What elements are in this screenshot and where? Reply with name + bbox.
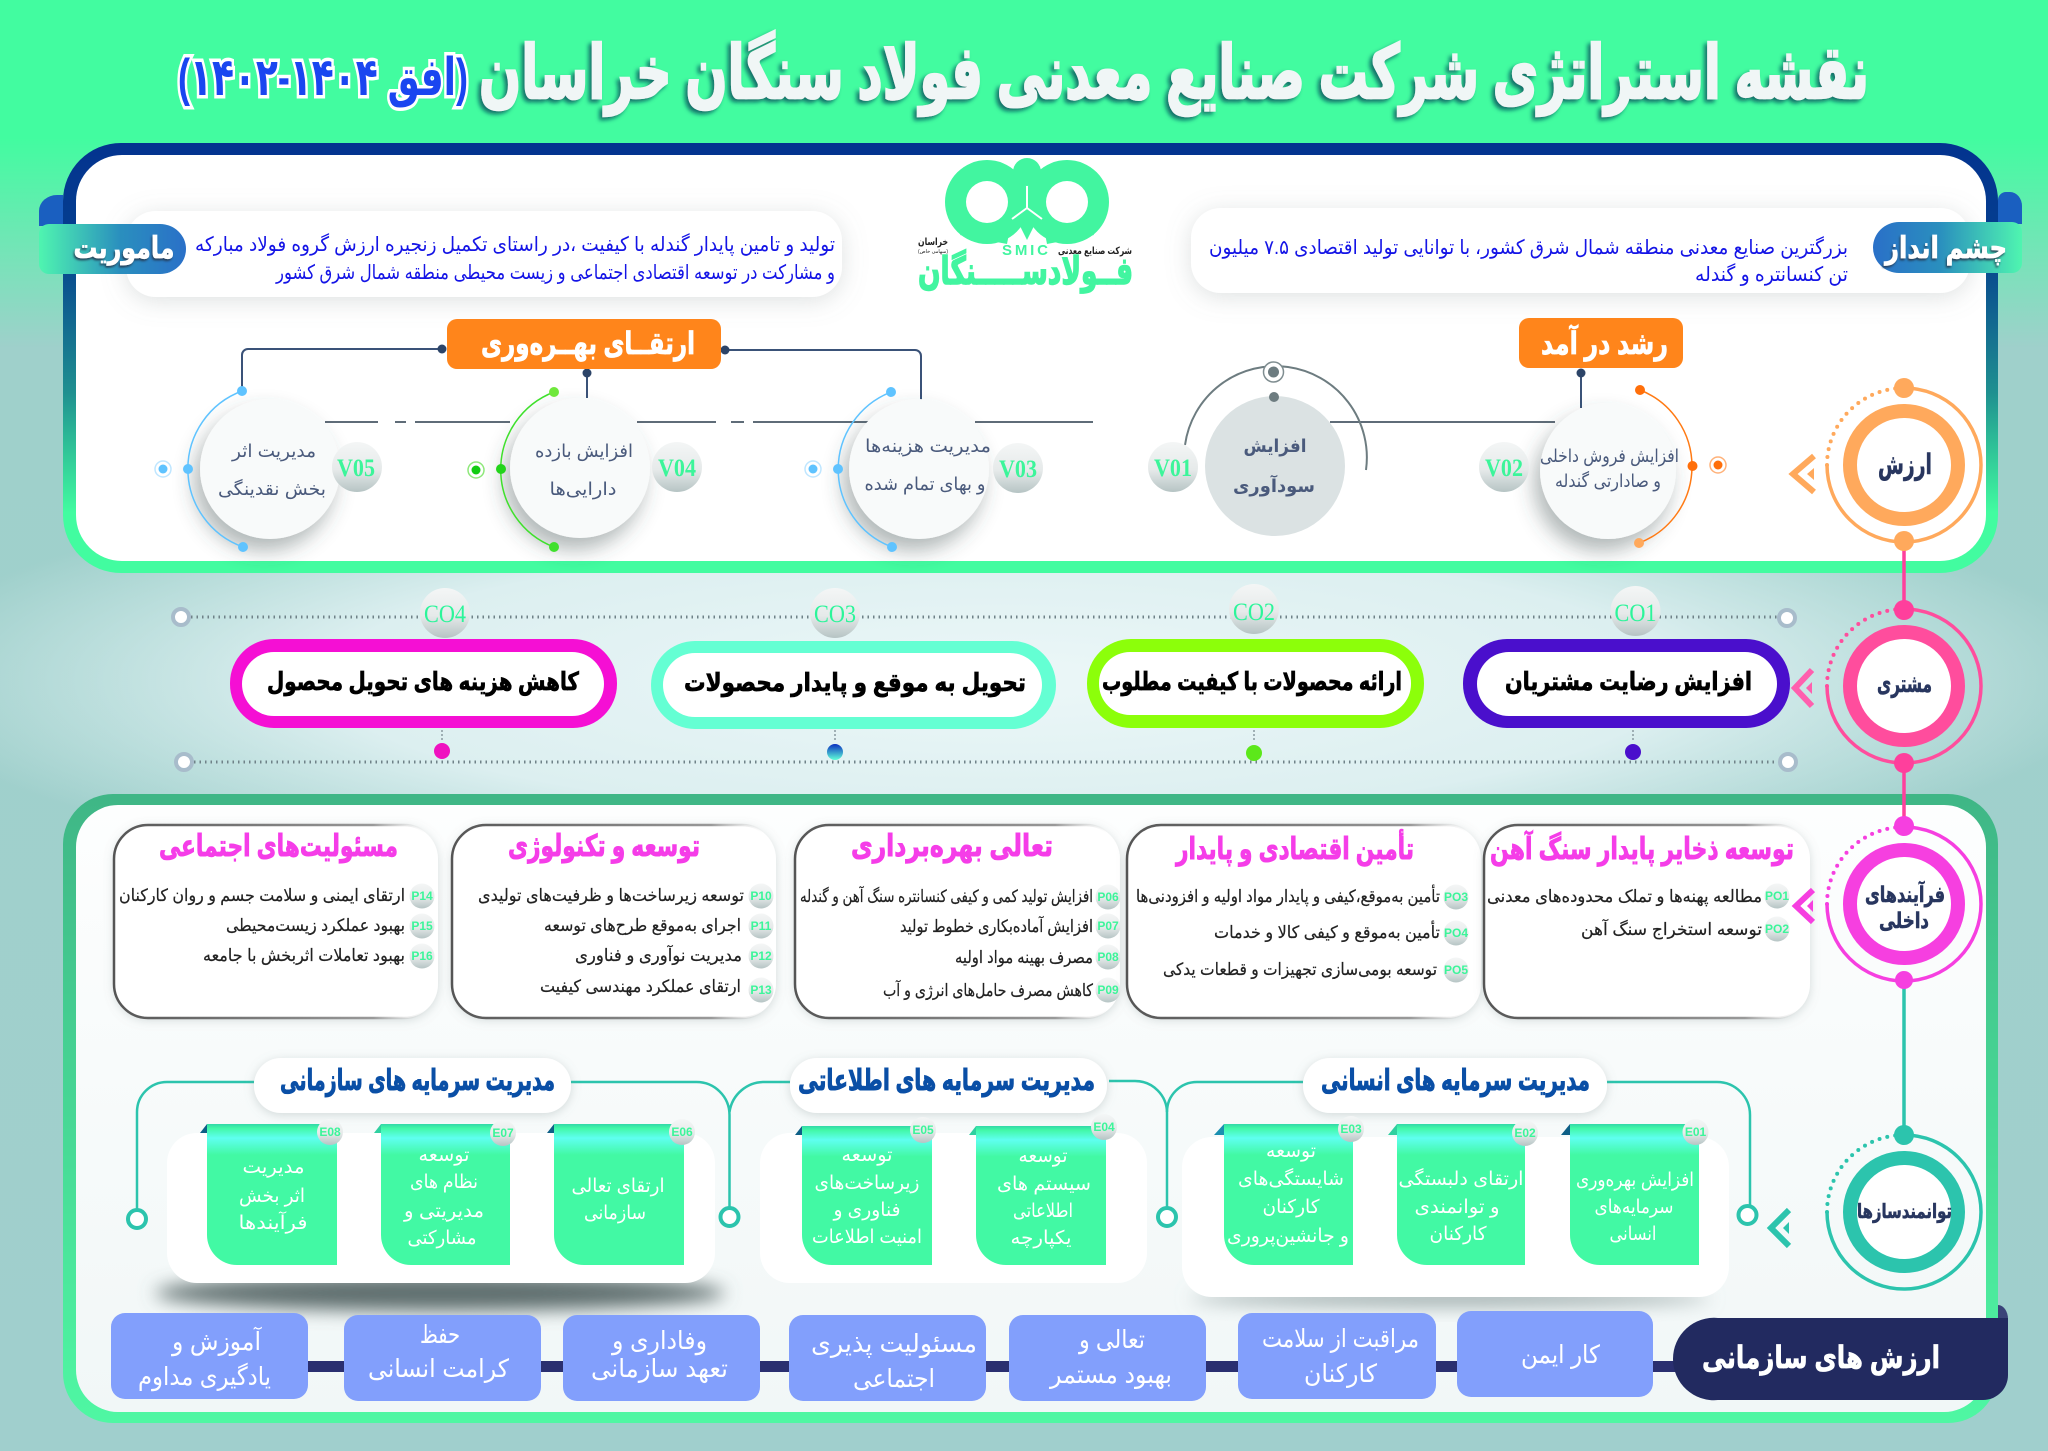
value: excellence: تعالی و	[1077, 1326, 1145, 1355]
card E06: E06	[671, 1125, 693, 1139]
enabler panel: organizational capital	[167, 1058, 715, 1283]
process card: operational excellence	[795, 825, 1120, 1018]
value: human dignity: کرامت انسانی	[368, 1355, 509, 1383]
panel: top strategy frame	[63, 143, 1998, 573]
process card: operational excellence: افزایش آماده‌بکاری خطوط تولید	[900, 915, 1093, 936]
value: loyalty	[563, 1315, 760, 1401]
goal V01	[1148, 362, 1367, 536]
card E01: E01	[1685, 1125, 1706, 1139]
value: loyalty: تعهد سازمانی	[591, 1355, 728, 1384]
card E04: اطلاعاتی	[1013, 1201, 1073, 1222]
process card: development and technology: P11	[751, 919, 772, 933]
value: employee health: مراقبت از سلامت	[1262, 1325, 1419, 1353]
panel: bottom frame	[63, 794, 1998, 1423]
enabler panel: human capital: مدیریت سرمایه های انسانی	[1321, 1065, 1590, 1097]
process card: iron ore reserves	[1484, 825, 1810, 1018]
process card: operational excellence: کاهش مصرف حامل‌های انرژی و آب	[883, 979, 1094, 1000]
mission label	[39, 195, 186, 274]
process card: sustainable economic supply: تأمین اقتصادی و پایدار	[1175, 829, 1414, 867]
card E08: E08	[319, 1125, 341, 1139]
process card: development and technology: توسعه زیرساخت‌ها و ظرفیت‌های تولیدی	[478, 886, 744, 905]
value: human dignity	[344, 1315, 541, 1401]
mission label: ماموریت	[74, 232, 174, 265]
process card: development and technology: مدیریت نوآوری و فناوری	[575, 944, 742, 965]
vision label	[1873, 192, 2022, 273]
vision text: بزرگترین صنایع معدنی منطقه شمال شرق کشور، با توانایی تولید اقتصادی ۷.۵ میلیون	[1209, 236, 1848, 259]
customer goal CO1: افزایش رضایت مشتریان	[1505, 668, 1752, 697]
card E02: کارکنان	[1430, 1224, 1487, 1245]
customer goal CO3	[651, 588, 1056, 760]
goal V04: V04	[658, 455, 696, 482]
connector lines: productivity and revenue	[242, 344, 1586, 422]
card E07: مشارکتی	[408, 1228, 476, 1249]
value: safe work	[1457, 1311, 1653, 1397]
value: social responsibility: اجتماعی	[853, 1365, 935, 1393]
value: employee health: کارکنان	[1304, 1360, 1377, 1388]
process card: social responsibility: ارتقای ایمنی و سلامت جسم و روان کارکنان	[119, 886, 405, 906]
card E07: توسعه	[418, 1145, 470, 1166]
card E05: زیرساخت‌های	[814, 1173, 920, 1194]
process card: social responsibility	[114, 825, 438, 1018]
value: learning: آموزش و	[170, 1326, 262, 1357]
card E05: فناوری و	[833, 1200, 900, 1221]
goal V05: بخش نقدینگی	[218, 478, 326, 499]
card E01: افزایش بهره‌وری	[1576, 1170, 1694, 1191]
card E01: سرمایه‌های	[1594, 1197, 1674, 1218]
card E05: توسعه	[842, 1145, 892, 1166]
customer goal CO1: CO1	[1614, 600, 1656, 627]
goal V04: دارایی‌ها	[550, 479, 616, 499]
heading: productivity	[447, 319, 721, 369]
card E03: کارکنان	[1262, 1197, 1320, 1218]
organizational values label	[1673, 1305, 2008, 1400]
enabler group shadows	[155, 1275, 1710, 1311]
logo	[918, 158, 1133, 293]
logo: (سهامی خاص)	[918, 249, 948, 255]
card E07	[374, 1120, 516, 1265]
process card: sustainable economic supply: تأمین به‌موقع و کیفی کالا و خدمات	[1214, 920, 1440, 943]
card E06: سازمانی	[584, 1203, 646, 1224]
process card: development and technology: P13	[750, 983, 772, 997]
customer goal CO4: کاهش هزینه های تحویل محصول	[267, 668, 579, 697]
value: learning: یادگیری مداوم	[138, 1362, 271, 1392]
process card: sustainable economic supply: PO3	[1444, 890, 1468, 904]
enabler panel: human capital	[1182, 1058, 1729, 1297]
process card: iron ore reserves: توسعه ذخایر پایدار سنگ آهن	[1490, 830, 1794, 867]
perspective: internal processes: فرآیندهای	[1865, 880, 1945, 908]
goal V02: افزایش فروش داخلی	[1540, 446, 1679, 467]
customer goal CO4: CO4	[424, 601, 466, 628]
card E04: یکپارچه	[1010, 1228, 1072, 1249]
enabler panel: information capital: مدیریت سرمایه های اطلاعاتی	[798, 1065, 1095, 1097]
process card: development and technology: ارتقای عملکرد مهندسی کیفیت	[540, 977, 741, 997]
process card: iron ore reserves: PO1	[1765, 889, 1789, 903]
value: excellence	[1009, 1315, 1206, 1401]
mission text	[195, 233, 835, 284]
enabler panel: information capital	[760, 1058, 1147, 1283]
logo: شرکت صنایع معدنی	[1058, 246, 1132, 257]
card E07: E07	[492, 1126, 514, 1140]
card E01: انسانی	[1610, 1224, 1656, 1245]
goal V02	[1479, 385, 1726, 548]
organizational values label: ارزش های سازمانی	[1702, 1340, 1940, 1376]
process card: sustainable economic supply	[1127, 825, 1481, 1018]
goal V03	[805, 387, 1043, 552]
card E05	[795, 1117, 936, 1265]
enabler panel: organizational capital: مدیریت سرمایه های سازمانی	[280, 1065, 555, 1097]
perspective: value: ارزش	[1878, 449, 1932, 481]
goal V04: افزایش بازده	[535, 441, 633, 462]
customer goal CO2	[1087, 584, 1424, 761]
vision label: چشم انداز	[1883, 232, 2007, 266]
perspective: customer	[1795, 600, 1981, 773]
perspective: enablers	[1771, 1125, 1981, 1289]
value: loyalty: وفاداری و	[610, 1327, 707, 1356]
goal V01: سودآوری	[1233, 474, 1315, 497]
card E04: E04	[1093, 1120, 1115, 1134]
heading: productivity: ارتقــای بهــره‌وری	[481, 326, 695, 362]
perspective: internal processes	[1796, 816, 1981, 989]
process card: operational excellence: P08	[1097, 950, 1119, 964]
card E03: شایستگی‌های	[1238, 1167, 1344, 1190]
card E02	[1388, 1120, 1538, 1265]
process card: sustainable economic supply: PO4	[1444, 926, 1468, 940]
goal V03: و بهای تمام شده	[864, 474, 986, 495]
customer goal CO2: CO2	[1233, 599, 1275, 626]
customer goal CO1	[1463, 586, 1790, 760]
customer goal CO2: ارائه محصولات با کیفیت مطلوب	[1102, 668, 1402, 697]
process card: iron ore reserves: PO2	[1765, 922, 1789, 936]
card E08	[200, 1119, 343, 1265]
value: human dignity: حفظ	[420, 1321, 460, 1349]
process card: operational excellence: P06	[1097, 890, 1119, 904]
perspective: internal processes: داخلی	[1879, 908, 1929, 933]
process card: social responsibility: P14	[411, 889, 433, 903]
process card: sustainable economic supply: تأمین به‌موقع،کیفی و پایدار مواد اولیه و افزودنی‌ها	[1136, 884, 1440, 907]
goal V02: و صادارتی گندله	[1555, 470, 1661, 492]
process card: development and technology: توسعه و تکنولوژی	[508, 830, 700, 864]
goal V01: افزایش	[1244, 436, 1306, 457]
process card: sustainable economic supply: توسعه بومی‌سازی تجهیزات و قطعات یدکی	[1163, 960, 1437, 980]
process card: iron ore reserves: مطالعه پهنه‌ها و تملک محدوده‌های معدنی	[1487, 887, 1762, 907]
goal V05: مدیریت اثر	[231, 441, 316, 462]
value: social responsibility: مسئولیت پذیری	[811, 1330, 977, 1358]
enabler connectors	[128, 1081, 1756, 1228]
customer goal CO4	[230, 588, 617, 759]
card E08: مدیریت	[242, 1157, 304, 1178]
logo: SMIC	[1002, 242, 1052, 259]
process card: development and technology	[452, 825, 776, 1018]
goal V05: V05	[337, 455, 375, 482]
goal V05	[155, 386, 382, 552]
card E02: ارتقای دلبستگی	[1398, 1167, 1524, 1190]
value: learning	[111, 1313, 308, 1399]
logo: خراسان	[918, 237, 948, 248]
process card: operational excellence: مصرف بهینه مواد اولیه	[955, 948, 1093, 968]
heading: revenue growth	[1519, 318, 1683, 368]
title: (افق ۱۴۰۴-۱۴۰۲)	[178, 49, 468, 108]
card E06	[547, 1119, 695, 1265]
goal V02: V02	[1485, 455, 1523, 482]
card E03: و جانشین‌پروری	[1227, 1226, 1349, 1247]
value: safe work: کار ایمن	[1521, 1341, 1600, 1369]
card E03: E03	[1340, 1122, 1362, 1136]
card E07: نظام های	[410, 1172, 478, 1193]
process card: operational excellence: P07	[1097, 919, 1119, 933]
perspective: customer: مشتری	[1877, 671, 1932, 698]
customer rows: dotted guides	[173, 609, 1796, 770]
organizational values band	[111, 1305, 2008, 1401]
card E08: اثر بخش	[239, 1186, 305, 1207]
heading: revenue growth: رشد در آمد	[1541, 324, 1668, 362]
process card: development and technology: P10	[750, 889, 772, 903]
card E04: توسعه	[1018, 1146, 1068, 1167]
process card: iron ore reserves: توسعه استخراج سنگ آهن	[1581, 918, 1762, 940]
logo: فــولادســـــنگان	[918, 249, 1133, 293]
card E02: و توانمندی	[1414, 1197, 1500, 1218]
value: employee health	[1238, 1313, 1436, 1399]
mission text: و مشارکت در توسعه اقتصادی اجتماعی و زیست محیطی منطقه شمال شرق کشور	[275, 262, 835, 284]
process card: operational excellence: تعالی بهره‌برداری	[851, 830, 1053, 863]
card E04	[969, 1114, 1117, 1265]
process card: sustainable economic supply: PO5	[1444, 963, 1468, 977]
perspective: value	[1793, 378, 1981, 551]
card E08: فرآیندها	[238, 1210, 308, 1234]
process card: social responsibility: P16	[411, 949, 433, 963]
card E05: امنیت اطلاعات	[812, 1227, 922, 1248]
process card: social responsibility: مسئولیت‌های اجتماعی	[159, 830, 398, 863]
process card: social responsibility: P15	[411, 919, 433, 933]
value: social responsibility	[789, 1315, 986, 1401]
card E02: E02	[1514, 1126, 1536, 1140]
process card: development and technology: اجرای به‌موقع طرح‌های توسعه	[544, 916, 741, 936]
card E06: ارتقای تعالی	[572, 1176, 664, 1197]
process card: operational excellence: P09	[1097, 983, 1119, 997]
goal V04	[468, 387, 702, 552]
process card: operational excellence: افزایش تولید کمی و کیفی کنسانتره سنگ آهن و گندله	[800, 885, 1093, 906]
panel: vision	[1191, 208, 1970, 293]
customer goal CO3: CO3	[814, 601, 856, 628]
process card: development and technology: P12	[750, 949, 772, 963]
card E07: مدیریتی و	[403, 1201, 484, 1222]
process card: social responsibility: بهبود عملکرد زیست‌محیطی	[226, 916, 405, 936]
customer goal CO3: تحویل به موقع و پایدار محصولات	[684, 669, 1026, 698]
card E03	[1214, 1116, 1364, 1265]
perspective: enablers: توانمندسازها	[1857, 1201, 1952, 1223]
spine lines between perspectives	[1902, 541, 1906, 1135]
value: excellence: بهبود مستمر	[1048, 1361, 1172, 1390]
process card: social responsibility: بهبود تعاملات اثربخش با جامعه	[203, 946, 405, 966]
goal V01: V01	[1154, 455, 1192, 482]
vision text	[1209, 236, 1848, 286]
card E01	[1561, 1119, 1708, 1265]
goal V03: مدیریت هزینه‌ها	[865, 436, 991, 457]
card E05: E05	[912, 1123, 934, 1137]
panel: mission	[126, 211, 842, 297]
card E04: سیستم های	[997, 1174, 1091, 1195]
goal V03: V03	[999, 456, 1037, 483]
card E03: توسعه	[1266, 1141, 1316, 1162]
vision text: تن کنسانتره و گندله	[1695, 263, 1848, 286]
mission text: تولید و تامین پایدار گندله با کیفیت ،در راستای تکمیل زنجیره ارزش گروه فولاد مبارکه	[195, 233, 835, 257]
